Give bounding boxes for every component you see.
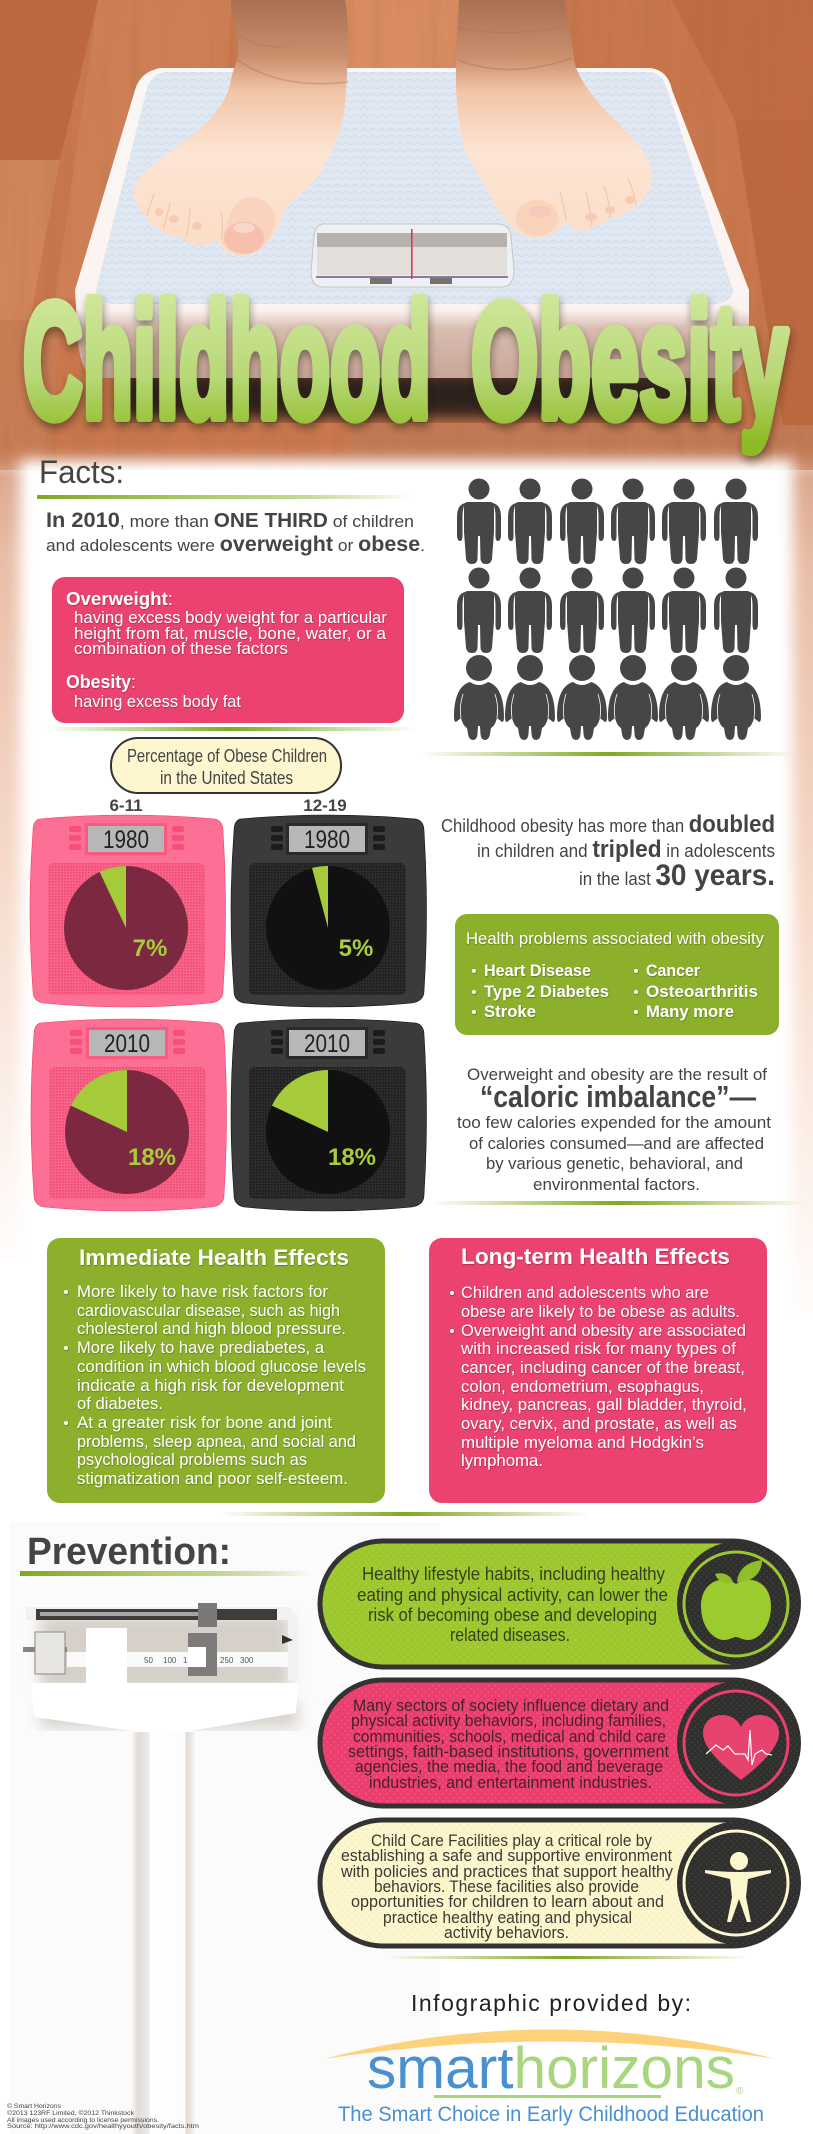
- photo: beam scale: [10, 1522, 440, 2134]
- pie scale: 12-19 in 1980: 5%: [339, 935, 373, 962]
- panel: long-term health effects: with increased risk for many types of: [460, 1340, 736, 1358]
- chart heading pill: in the United States: [160, 768, 293, 788]
- callout: healthy lifestyle habits: Healthy lifestyle habits, including healthy: [362, 1564, 665, 1584]
- panel: immediate health effects: cholesterol and high blood pressure.: [77, 1320, 346, 1338]
- callout: child care facilities: activity behaviors.: [444, 1924, 569, 1942]
- photo: beam scale: 100: [163, 1656, 177, 1665]
- credits: © Smart Horizons: [7, 2102, 62, 2110]
- chart heading pill: [111, 738, 341, 793]
- logo: Smart Horizons: The Smart Choice in Early Childhood Education: [338, 2103, 764, 2126]
- panel: health problems: [455, 914, 779, 1035]
- pie scale: 6-11 in 1980: 1980: [103, 826, 149, 854]
- panel: long-term health effects: multiple myeloma and Hodgkin’s: [461, 1434, 704, 1452]
- callout: sectors of society: communities, schools, medical and child care: [353, 1728, 666, 1746]
- callout: child care facilities: practice healthy eating and physical: [383, 1909, 632, 1927]
- callout: child care facilities: with policies and practices that support healthy: [340, 1863, 674, 1881]
- age label: 6-11: [109, 796, 143, 815]
- text: caloric imbalance: too few calories expended for the amount: [457, 1113, 771, 1132]
- panel: long-term health effects: Children and adolescents who are: [461, 1284, 709, 1302]
- chart heading pill: Percentage of Obese Children: [127, 746, 327, 766]
- panel: long-term health effects: [429, 1238, 767, 1503]
- text: caloric imbalance: by various genetic, behavioral, and: [486, 1154, 743, 1173]
- panel: long-term health effects: Long-term Health Effects: [461, 1244, 730, 1269]
- text: caloric imbalance: [457, 1065, 771, 1194]
- callout: healthy lifestyle habits: risk of becoming obese and developing: [368, 1605, 657, 1625]
- text: caloric imbalance: Overweight and obesity are the result of: [467, 1065, 767, 1084]
- callout: sectors of society: Many sectors of society influence dietary and: [353, 1697, 669, 1715]
- panel: health problems: Health problems associated with obesity: [466, 929, 764, 948]
- panel: health problems: Type 2 Diabetes: [484, 983, 609, 1001]
- icon: apple: [677, 1541, 801, 1665]
- panel: immediate health effects: Immediate Health Effects: [79, 1245, 349, 1270]
- pie scale: 12-19 in 1980: [231, 815, 426, 1007]
- panel: definitions: combination of these factors: [74, 640, 288, 658]
- icon: heart: [677, 1681, 801, 1805]
- panel: immediate health effects: stigmatization and poor self-esteem.: [77, 1470, 348, 1488]
- statement: one third: [46, 509, 425, 556]
- callout: child care facilities: [320, 1820, 801, 1946]
- pie scale: 12-19 in 1980: 1980: [304, 826, 350, 854]
- pie scale: 12-19 in 2010: 2010: [304, 1030, 350, 1058]
- text: caloric imbalance: environmental factors.: [533, 1175, 700, 1194]
- credits: ©2013 123RF Limited, ©2012 Thinkstock: [7, 2109, 135, 2117]
- panel: long-term health effects: lymphoma.: [461, 1452, 543, 1470]
- callout: sectors of society: physical activity behaviors, including families,: [351, 1712, 666, 1730]
- title: Childhood: [23, 269, 431, 452]
- logo: Smart Horizons: [324, 2030, 776, 2126]
- panel: immediate health effects: problems, sleep apnea, and social and: [77, 1433, 356, 1451]
- pie scale: 6-11 in 2010: 18%: [128, 1144, 176, 1171]
- hero photo: left foot: [134, 0, 348, 255]
- photo: beam scale: 50: [144, 1656, 153, 1665]
- panel: immediate health effects: More likely to have risk factors for: [77, 1283, 329, 1301]
- panel: immediate health effects: At a greater risk for bone and joint: [77, 1414, 332, 1432]
- hero photo: bathroom scale: [75, 68, 749, 418]
- panel: immediate health effects: psychological problems such as: [77, 1451, 307, 1469]
- logo: Smart Horizons: ®: [736, 2086, 744, 2097]
- statement: one third: and adolescents were overweight or obese.: [46, 533, 425, 556]
- pie scale: 12-19 in 2010: 18%: [328, 1144, 376, 1171]
- panel: definitions: having excess body fat: [74, 693, 241, 711]
- panel: long-term health effects: obese are likely to be obese as adults.: [461, 1303, 740, 1321]
- text: caloric imbalance: “caloric imbalance”—: [480, 1079, 756, 1114]
- pie scale: 6-11 in 1980: 7%: [133, 935, 167, 962]
- white content panel: [20, 460, 793, 2134]
- pie scale: 6-11 in 2010: [31, 1019, 226, 1211]
- callout: child care facilities: opportunities for children to learn about and: [351, 1893, 664, 1911]
- panel: immediate health effects: condition in which blood glucose levels: [77, 1358, 366, 1376]
- logo: Smart Horizons: smarthorizons: [367, 2036, 735, 2101]
- panel: long-term health effects: kidney, pancreas, gall bladder, thyroid,: [461, 1396, 747, 1414]
- callout: healthy lifestyle habits: related diseases.: [450, 1625, 570, 1645]
- panel: health problems: Heart Disease: [484, 962, 591, 980]
- credits: [7, 2102, 199, 2130]
- pictogram: one third of children: [454, 478, 761, 740]
- photo: beam scale: 150: [183, 1656, 197, 1665]
- pie scale: 12-19 in 2010: [231, 1019, 426, 1211]
- panel: immediate health effects: indicate a high risk for development: [77, 1377, 344, 1395]
- callout: child care facilities: Child Care Facilities play a critical role by: [371, 1832, 653, 1850]
- callout: child care facilities: establishing a safe and supportive environment: [341, 1847, 672, 1865]
- panel: health problems: Stroke: [484, 1003, 536, 1021]
- photo: beam scale: 250: [220, 1656, 234, 1665]
- heading: Prevention: Prevention:: [27, 1531, 231, 1573]
- text: doubled and tripled: in children and tripled in adolescents: [477, 836, 775, 863]
- panel: definitions: Obesity:: [66, 672, 136, 692]
- panel: health problems: Many more: [646, 1003, 734, 1021]
- background: wood floor: [0, 0, 813, 470]
- callout: child care facilities: behaviors. These facilities also provide: [374, 1878, 639, 1896]
- panel: health problems: Osteoarthritis: [646, 983, 758, 1001]
- text: doubled and tripled: in the last 30 years.: [579, 859, 775, 892]
- callout: sectors of society: industries, and entertainment industries.: [369, 1774, 652, 1792]
- pie scale: 6-11 in 2010: 2010: [104, 1030, 150, 1058]
- credits: All images used according to license permissions.: [7, 2117, 159, 2124]
- panel: health problems: Cancer: [646, 962, 701, 980]
- panel: long-term health effects: Overweight and obesity are associated: [461, 1322, 746, 1340]
- page side tint: [0, 445, 813, 1320]
- panel: long-term health effects: cancer, including cancer of the breast,: [461, 1359, 745, 1377]
- credits: Source: http://www.cdc.gov/healthyyouth/obesity/facts.htm: [7, 2123, 199, 2130]
- text: caloric imbalance: of calories consumed—and are affected: [469, 1134, 764, 1153]
- age label: 12-19: [303, 796, 347, 815]
- heading: Facts: Facts:: [39, 454, 124, 490]
- panel: immediate health effects: [47, 1238, 385, 1503]
- panel: immediate health effects: of diabetes.: [77, 1395, 163, 1413]
- pie scale: 6-11 in 1980: [30, 815, 226, 1007]
- panel: immediate health effects: More likely to have prediabetes, a: [77, 1339, 325, 1357]
- footer: provided by: Infographic provided by:: [411, 1990, 691, 2016]
- callout: sectors of society: [320, 1680, 801, 1806]
- dial window: [311, 224, 514, 287]
- panel: long-term health effects: ovary, cervix, and prostate, as well as: [461, 1415, 737, 1433]
- photo: beam scale: 300: [240, 1656, 254, 1665]
- icon: person: [677, 1821, 801, 1945]
- panel: definitions: height from fat, muscle, bone, water, or a: [74, 625, 387, 643]
- text: doubled and tripled: [441, 811, 775, 892]
- text: doubled and tripled: Childhood obesity has more than doubled: [441, 811, 775, 838]
- callout: sectors of society: settings, faith-based institutions, government: [348, 1743, 669, 1761]
- statement: one third: In 2010, more than ONE THIRD of children: [46, 509, 414, 532]
- callout: healthy lifestyle habits: eating and physical activity, can lower the: [357, 1585, 668, 1605]
- hero photo: right foot: [456, 0, 652, 238]
- panel: long-term health effects: colon, endometrium, esophagus,: [461, 1378, 704, 1396]
- callout: healthy lifestyle habits: [320, 1541, 801, 1667]
- callout: sectors of society: agencies, the media, the food and beverage: [355, 1758, 663, 1776]
- panel: immediate health effects: cardiovascular disease, such as high: [77, 1302, 340, 1320]
- panel: definitions: having excess body weight for a particular: [74, 609, 388, 627]
- panel: definitions: Overweight:: [66, 589, 173, 609]
- panel: definitions: [52, 577, 404, 723]
